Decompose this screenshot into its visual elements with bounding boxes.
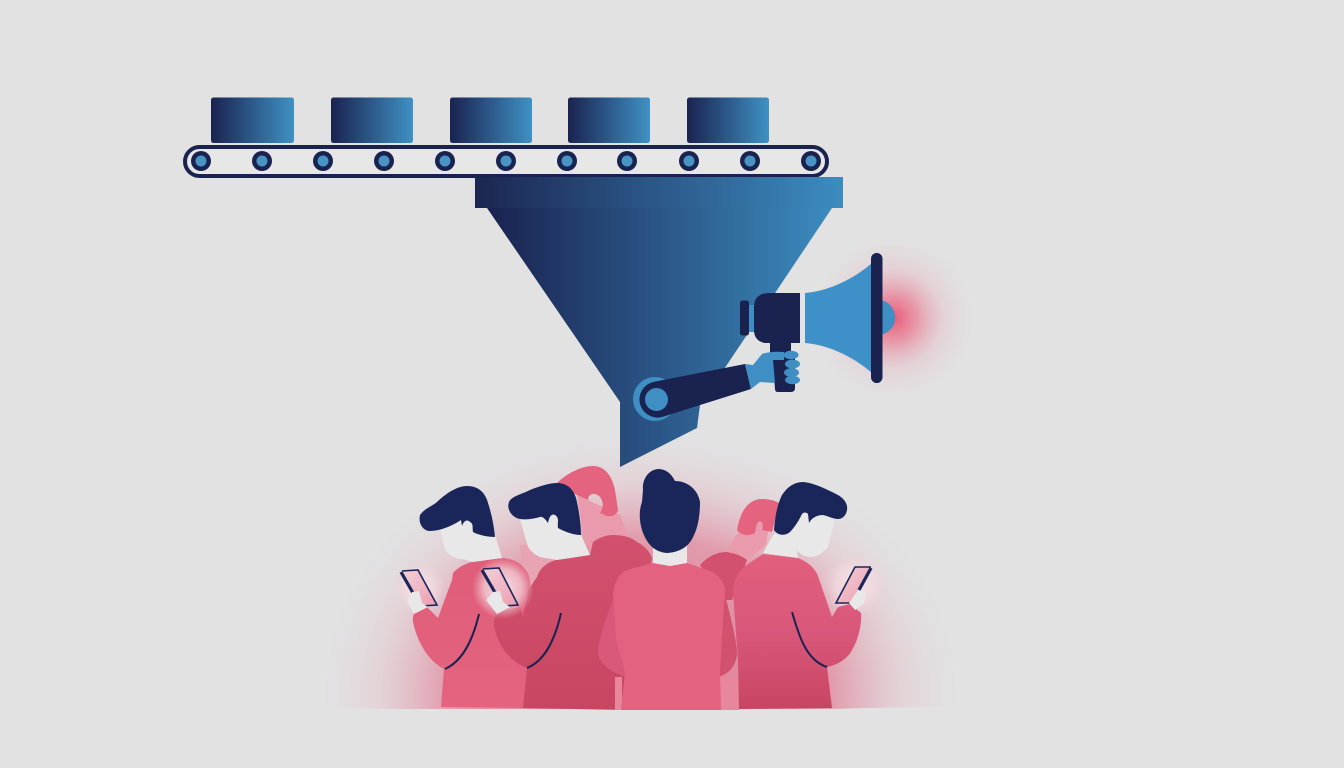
boxes [211, 98, 769, 143]
phone [836, 567, 871, 603]
torso and arm [494, 535, 652, 710]
phone glow [823, 553, 887, 617]
hand [486, 591, 510, 614]
funnel rim [475, 177, 843, 208]
megaphone glow [813, 238, 973, 398]
arm [639, 364, 751, 418]
torso and arm [413, 558, 530, 708]
phone [482, 568, 518, 606]
back connector [748, 305, 756, 332]
gap fill under centre figure [615, 677, 740, 710]
sleeve line [445, 614, 479, 669]
robot hand [745, 351, 800, 389]
hair [420, 486, 495, 537]
robot arm [633, 364, 751, 421]
person 3: centre from behind [598, 469, 737, 710]
torso [613, 563, 725, 710]
horn dome [880, 300, 895, 335]
hand [407, 591, 428, 614]
hand [849, 590, 866, 610]
belt [185, 147, 827, 176]
people group [394, 466, 887, 710]
sleeve line [527, 613, 561, 668]
palm [745, 352, 784, 389]
right arm [715, 595, 737, 677]
hair [774, 482, 847, 535]
sleeve line [792, 612, 827, 667]
horn [805, 263, 872, 373]
funnel [475, 177, 843, 467]
person 2: left with phone [472, 483, 652, 710]
torso and arm [733, 554, 861, 709]
face and neck [520, 505, 590, 560]
phone glow [394, 562, 446, 614]
phone [401, 570, 437, 606]
person 1: left with phone [394, 486, 530, 708]
grip [772, 352, 795, 392]
person 4: right with phone [733, 482, 887, 709]
funnel cone [487, 208, 832, 467]
person: back right [700, 499, 779, 600]
person: back left [520, 466, 628, 590]
conveyor belt with boxes [185, 98, 827, 176]
crowd glow [358, 464, 922, 709]
back cap [740, 300, 749, 336]
hair [640, 469, 700, 553]
rollers [191, 151, 821, 171]
phone glow [472, 557, 534, 619]
joint ring [633, 377, 677, 421]
neck [653, 545, 687, 566]
fingers [784, 351, 800, 384]
driver body [754, 293, 800, 354]
left arm [598, 600, 630, 677]
illustration [183, 98, 956, 710]
megaphone [740, 253, 895, 392]
hair [508, 483, 581, 535]
joint pin [645, 388, 668, 411]
rim [871, 253, 882, 383]
face and neck [440, 512, 502, 562]
face and neck [763, 505, 835, 558]
